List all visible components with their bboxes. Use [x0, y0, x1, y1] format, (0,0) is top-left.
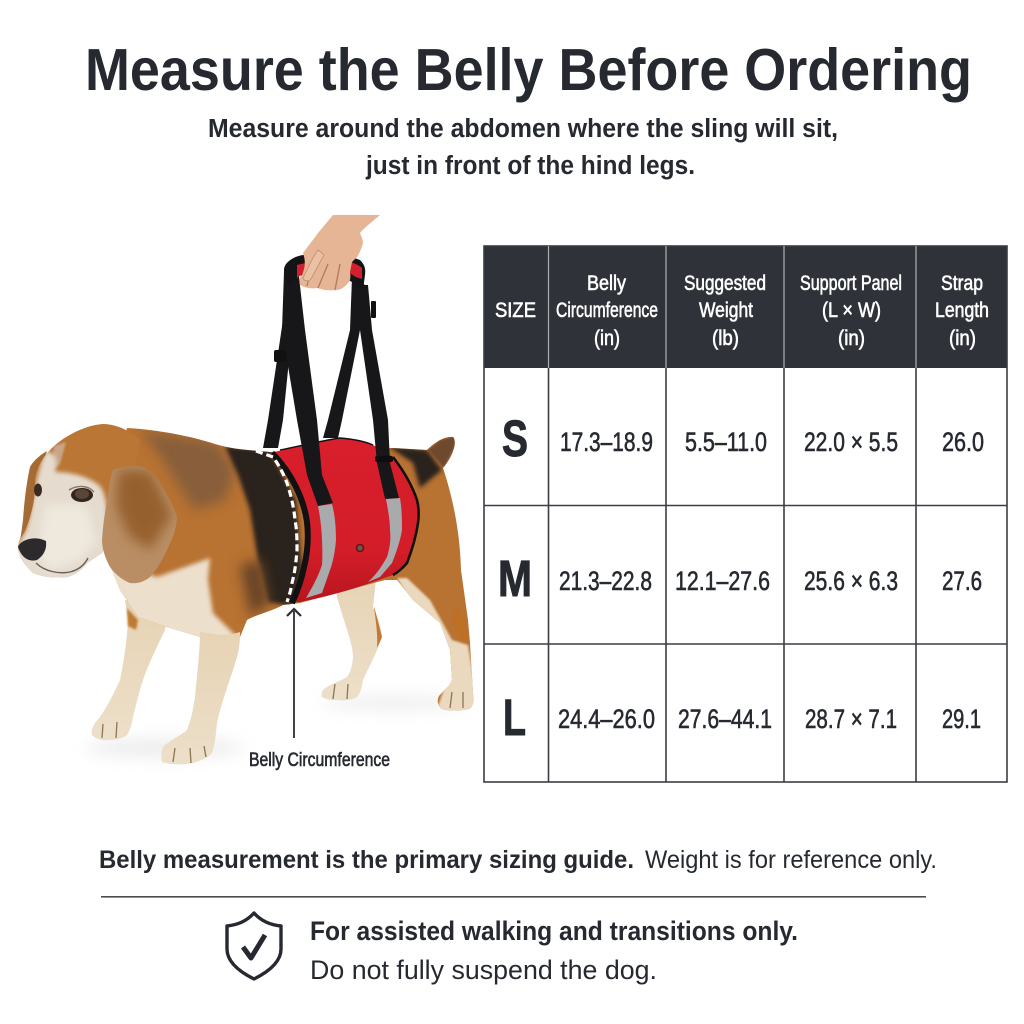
row L: 24.4–26.0 — [558, 704, 655, 734]
finger shading — [307, 264, 340, 290]
sizing note — [99, 846, 937, 874]
handle red padding — [297, 259, 362, 279]
row L — [503, 689, 981, 746]
nose — [18, 538, 46, 561]
near eye — [69, 486, 94, 502]
near ear — [102, 466, 177, 583]
icon: shield with check — [227, 913, 281, 979]
sling right binding — [393, 457, 419, 575]
table header labels: Weight — [699, 299, 753, 322]
table header labels: (in) — [949, 327, 976, 350]
row L: 29.1 — [942, 704, 981, 734]
table header labels: (in) — [838, 327, 865, 350]
front strap right — [360, 285, 399, 499]
sling black left binding — [272, 453, 308, 603]
table header labels: Suggested — [684, 272, 766, 295]
table header labels — [495, 272, 989, 350]
row S: 26.0 — [942, 427, 984, 457]
subtitle — [208, 115, 838, 180]
table header labels: Support Panel — [800, 272, 902, 295]
table header labels: Circumference — [556, 299, 658, 322]
mouth — [36, 558, 88, 573]
far front leg — [92, 600, 170, 740]
near front leg — [161, 632, 240, 764]
sizing table — [484, 246, 1007, 782]
sizing note: Belly measurement is the primary sizing guide. — [99, 846, 634, 874]
far rear leg — [321, 570, 382, 700]
body — [100, 428, 473, 710]
row L: 28.7 × 7.1 — [805, 704, 897, 734]
divider — [101, 896, 926, 898]
handle — [284, 254, 365, 290]
safety note: Do not fully suspend the dog. — [310, 955, 657, 985]
label: belly circumference: Belly Circumference — [249, 750, 390, 771]
sling — [270, 215, 419, 603]
safety note — [310, 916, 798, 985]
front strap left — [282, 268, 333, 506]
subtitle: Measure around the abdomen where the sling will sit, — [208, 115, 838, 143]
fur markings — [105, 430, 476, 712]
illustration: beagle wearing red support sling — [10, 215, 476, 764]
sizing note: Weight is for reference only. — [645, 846, 937, 874]
reflective strip left — [306, 504, 336, 598]
row S: S — [502, 410, 528, 467]
strap buckle left — [274, 350, 287, 362]
eyelet — [356, 544, 364, 552]
back strap left — [263, 320, 293, 448]
row M: 27.6 — [942, 566, 982, 596]
table grid — [484, 246, 1007, 782]
floor shadows — [85, 697, 470, 757]
far front leg orange mark — [127, 608, 138, 630]
arrow: belly circumference pointer — [287, 609, 301, 738]
row S — [502, 410, 984, 467]
row M: 25.6 × 6.3 — [804, 566, 898, 596]
subtitle: just in front of the hind legs. — [365, 152, 695, 180]
table header labels: (in) — [594, 327, 620, 350]
table header labels: SIZE — [495, 299, 536, 322]
row M: 12.1–27.6 — [675, 566, 770, 596]
far eye — [34, 484, 42, 496]
table header labels: Belly — [587, 272, 626, 295]
sling top edge — [280, 438, 373, 450]
row M — [498, 550, 982, 607]
belly measuring dashed line — [256, 451, 297, 602]
back strap right — [323, 277, 365, 438]
table header labels: Strap — [941, 272, 983, 295]
far rear leg orange mark — [374, 606, 382, 648]
table header labels: (L × W) — [822, 299, 881, 322]
row S: 22.0 × 5.5 — [804, 427, 898, 457]
face markings — [18, 441, 108, 578]
strap buckle right — [371, 301, 376, 318]
safety note: For assisted walking and transitions only. — [310, 916, 798, 946]
row L: L — [503, 689, 526, 746]
far ear — [20, 451, 47, 540]
row M: M — [498, 550, 532, 607]
table header labels: (lb) — [712, 327, 739, 350]
paw toes — [102, 684, 463, 763]
row S: 5.5–11.0 — [685, 427, 767, 457]
arm and hand — [300, 215, 380, 290]
head — [18, 424, 140, 578]
thumb — [303, 250, 324, 281]
table header background — [484, 246, 1007, 368]
table header labels: Length — [935, 299, 989, 322]
row M: 21.3–22.8 — [559, 566, 652, 596]
sling red barrel — [270, 438, 419, 602]
strap slider on sling — [375, 456, 393, 462]
row L: 27.6–44.1 — [678, 704, 772, 734]
row S: 17.3–18.9 — [560, 427, 653, 457]
reflective strip right — [368, 498, 402, 582]
